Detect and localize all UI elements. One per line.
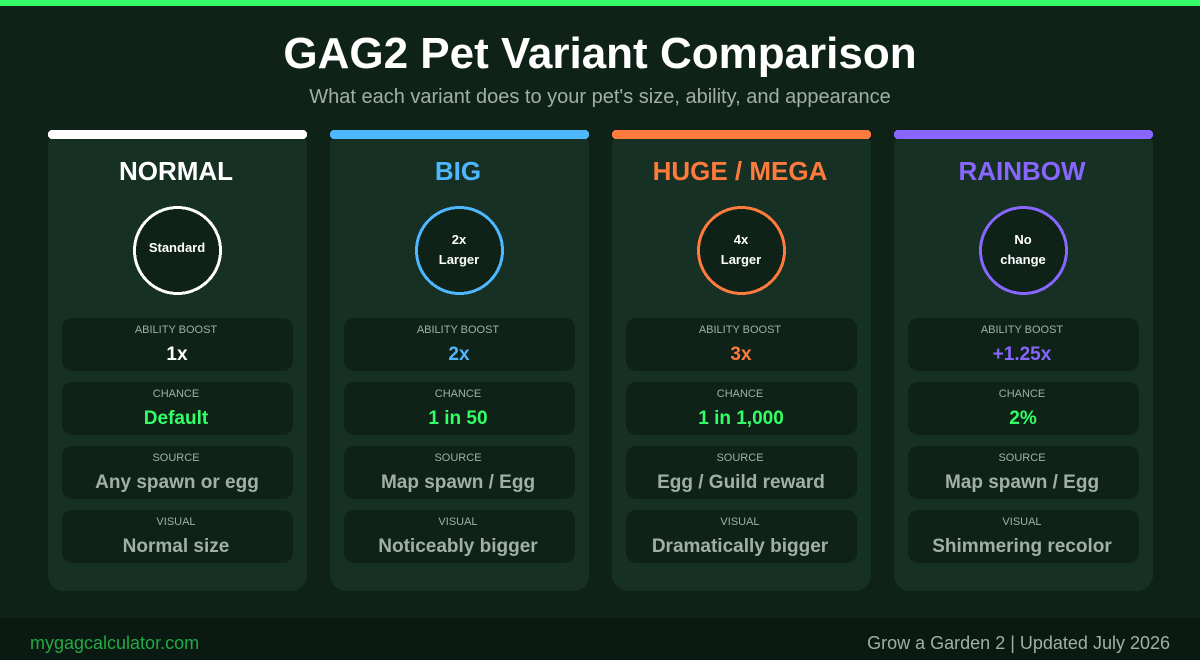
stat: chance (908, 382, 1139, 435)
icon: size circle 2x: 2x (452, 232, 467, 247)
stat: ability boost: ABILITY BOOST (417, 324, 499, 336)
panel: rainbow (894, 130, 1153, 591)
stat: source (908, 446, 1139, 499)
top accent bar (0, 0, 1200, 6)
stat: visual: VISUAL (438, 516, 478, 528)
icon: size circle 2x (416, 208, 502, 294)
stat: visual (626, 510, 857, 563)
heading: normal: NORMAL (119, 156, 233, 186)
stat: ability boost: ABILITY BOOST (981, 324, 1063, 336)
stat: source: Egg / Guild reward (657, 472, 825, 493)
icon: size circle 4x: Larger (721, 252, 761, 267)
stat: visual (344, 510, 575, 563)
stat: source: Map spawn / Egg (381, 472, 535, 493)
stat: ability boost (344, 318, 575, 371)
stat: chance: CHANCE (435, 388, 481, 400)
stat: visual: Noticeably bigger (378, 536, 538, 557)
subtitle: What each variant does to your pet's size, ability, and appearance (309, 86, 891, 108)
panel: big (330, 130, 589, 591)
panel: normal (48, 130, 307, 591)
stat: source (344, 446, 575, 499)
footer: game and date: Grow a Garden 2 | Updated July 2026 (867, 633, 1170, 653)
stat: visual: VISUAL (156, 516, 196, 528)
stat: chance (626, 382, 857, 435)
stat: visual: Shimmering recolor (932, 536, 1112, 557)
heading: rainbow: RAINBOW (958, 156, 1086, 186)
icon: size circle no change: No (1014, 232, 1032, 247)
stat: source (626, 446, 857, 499)
stat: source (62, 446, 293, 499)
footer: site link: mygagcalculator.com (30, 633, 199, 653)
footer (0, 618, 1200, 660)
stat: ability boost (62, 318, 293, 371)
stat: ability boost: ABILITY BOOST (699, 324, 781, 336)
stat: visual: Dramatically bigger (652, 536, 829, 557)
stat: source: SOURCE (152, 452, 200, 464)
stat: source: SOURCE (434, 452, 482, 464)
stat: ability boost (626, 318, 857, 371)
heading: huge / mega: HUGE / MEGA (653, 156, 828, 186)
stat: ability boost: ABILITY BOOST (135, 324, 217, 336)
stat: ability boost: +1.25x (993, 344, 1052, 365)
stat: ability boost: 3x (730, 344, 752, 365)
icon: size circle 2x: Larger (439, 252, 479, 267)
stat: visual: VISUAL (720, 516, 760, 528)
stat: source: Map spawn / Egg (945, 472, 1099, 493)
stat: visual: VISUAL (1002, 516, 1042, 528)
stat: source: SOURCE (998, 452, 1046, 464)
stat: chance: CHANCE (717, 388, 763, 400)
stat: ability boost: 2x (448, 344, 470, 365)
stat: ability boost (908, 318, 1139, 371)
icon: size circle no change (980, 208, 1066, 294)
stat: ability boost: 1x (166, 344, 188, 365)
stat: chance (62, 382, 293, 435)
icon: size circle 4x (698, 208, 784, 294)
stat: source: SOURCE (716, 452, 764, 464)
panel: huge / mega (612, 130, 871, 591)
icon: size circle standard (134, 208, 220, 294)
stat: visual (62, 510, 293, 563)
heading: big: BIG (435, 156, 481, 186)
stat: visual (908, 510, 1139, 563)
stat: source: Any spawn or egg (95, 472, 259, 493)
stat: chance: CHANCE (153, 388, 199, 400)
icon: size circle no change: change (1000, 252, 1046, 267)
stat: chance: 2% (1009, 408, 1037, 429)
icon: size circle 4x: 4x (734, 232, 749, 247)
stat: chance: Default (144, 408, 209, 429)
stat: chance: CHANCE (999, 388, 1045, 400)
icon: size circle standard: Standard (149, 240, 205, 255)
title: GAG2 Pet Variant Comparison (283, 29, 917, 78)
stat: visual: Normal size (123, 536, 229, 557)
stat: chance: 1 in 50 (428, 408, 488, 429)
stat: chance: 1 in 1,000 (698, 408, 784, 429)
stat: chance (344, 382, 575, 435)
